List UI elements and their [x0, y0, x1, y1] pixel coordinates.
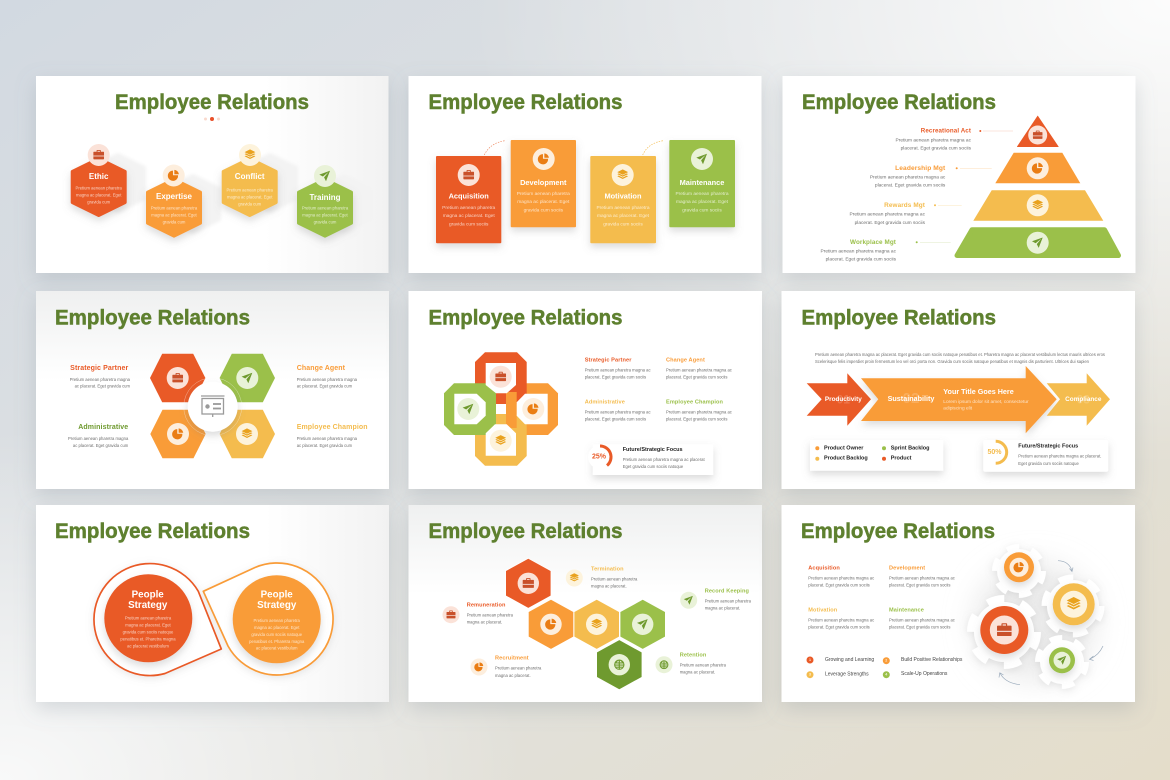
label: recreational act	[896, 128, 1013, 152]
circle: people strategy red: magna ac placerat. Eget	[125, 622, 172, 628]
hexagon: ethic: magna ac placerat. Eget	[76, 192, 122, 198]
arrow: compliance: 03	[1077, 392, 1090, 406]
circle: people strategy orange: penatibus et. Pharetra magna	[249, 639, 305, 644]
label: record keeping: magna ac placerat.	[705, 606, 740, 610]
arrow: sustainability: Lorem ipsum dolor sit amet, consectetur	[943, 399, 1029, 405]
label: remuneration: magna ac placerat.	[467, 620, 502, 624]
label: leadership mgt	[870, 165, 992, 188]
icon: briefcase	[490, 366, 512, 388]
gear: layers	[1053, 583, 1095, 625]
callout: future strategic focus 50%: Future/Strategic Focus	[1018, 443, 1078, 449]
numbered list: 1	[809, 658, 811, 662]
title: Employee Relations	[428, 90, 623, 114]
label: employee champion: Employee Champion	[666, 400, 724, 406]
dashed arrow	[643, 141, 663, 155]
title dots	[204, 117, 220, 121]
arrow: bottom	[999, 673, 1020, 685]
hexagon: administrative	[150, 410, 206, 458]
label: termination: Termination	[591, 567, 624, 573]
label: termination: magna ac placerat.	[591, 584, 627, 588]
hexagon: training: gravida cum	[314, 220, 337, 224]
card: development: gravida cum sociis	[524, 208, 564, 214]
label: change agent: placerat. Eget gravida cum sociis	[666, 374, 727, 380]
label: retention: magna ac placerat.	[680, 670, 715, 674]
label: recruitment: magna ac placerat.	[495, 673, 531, 678]
hexagon: conflict: Conflict	[235, 172, 265, 181]
label: remuneration: Pretium aenean pharetra	[467, 612, 514, 618]
circle: people strategy orange: magna ac placerat. Eget	[254, 625, 300, 630]
label: maintenance: Pretium aenean pharetra magna ac	[889, 618, 955, 622]
label: recreational act: placerat. Eget gravida cum sociis	[901, 146, 972, 152]
callout: future strategic focus 50%	[983, 440, 1108, 472]
arrow: compliance	[1047, 373, 1110, 426]
hexagon: employee champion	[220, 410, 275, 458]
arrow: sustainability: Your Title Goes Here	[943, 387, 1014, 396]
circle: people strategy red: gravida cum sociis natoque	[123, 630, 174, 634]
hexagon: training: magna ac placerat. Eget	[302, 212, 349, 218]
label: motivation: placerat. Eget gravida cum sociis	[808, 624, 870, 630]
pyramid tier: rewards	[973, 190, 1103, 221]
label: recreational act: Pretium aenean pharetra magna ac	[896, 138, 972, 144]
circle: people strategy orange	[233, 575, 321, 663]
arrow: sustainability: Sustainability	[888, 394, 934, 403]
pyramid tier: recreational	[1017, 116, 1058, 147]
numbered list	[806, 656, 963, 678]
card: acquisition: magna ac placerat. Eget	[443, 213, 495, 219]
label: strategic partner: Pretium aenean pharetra magna ac	[585, 368, 651, 372]
hexagon: expertise: Pretium aenean pharetra	[151, 206, 198, 210]
callout: future strategic focus 25%	[588, 444, 713, 475]
callout: future strategic focus 25%: Pretium aenean pharetra magna ac placerat	[623, 457, 705, 462]
circle: people strategy orange: People	[261, 590, 293, 600]
pyramid tier: workplace	[957, 230, 1118, 256]
label: strategic partner: placerat. Eget gravida cum sociis	[585, 374, 646, 380]
label: record keeping: Record Keeping	[705, 589, 749, 595]
hexagon: ethic: Pretium aenean pharetra	[76, 186, 123, 190]
card: acquisition	[436, 156, 501, 243]
label: administrative: Administrative	[585, 400, 625, 406]
numbered list: 4	[885, 673, 887, 677]
label: administrative: Pretium aenean pharetra magna	[68, 436, 129, 441]
arrow: sustainability: adipiscing elit	[943, 406, 973, 412]
hexagon: expertise: Expertise	[156, 192, 193, 201]
label: administrative: placerat. Eget gravida cum sociis	[585, 416, 646, 422]
hexagon: layers	[574, 599, 619, 649]
legend card: Product	[891, 456, 912, 462]
label: change agent	[666, 358, 732, 380]
circle: people strategy orange: Strategy	[257, 600, 297, 611]
circle: people strategy red: ac placerat vestibulum	[127, 644, 169, 648]
hexagon: training: Pretium aenean pharetra	[302, 206, 349, 210]
label: change agent	[297, 365, 358, 388]
gear: plane	[1049, 647, 1075, 673]
intro text: Scelerisque felis imperdiet proin fermentum leo vel orci porta non. Gravida cum sociis natoque penatibus et magnis dis parturient. Ultrices dui sapien	[815, 359, 1090, 364]
numbered list: 2	[885, 659, 887, 663]
label: recruitment: Recruitment	[495, 656, 529, 662]
intro text: Pretium aenean pharetra magna ac placerat. Eget gravida cum sociis natoque penatibus et. Pharetra magna ac placerat vestibulum lectus mauris ultrices eros	[815, 352, 1105, 357]
hexagon: plane	[620, 599, 665, 649]
hexagon: ethic	[72, 144, 144, 216]
panel: honeycomb	[408, 505, 762, 702]
hexagon: conflict: magna ac placerat. Eget	[227, 194, 273, 200]
label: termination: Pretium aenean pharetra	[591, 576, 638, 582]
arrow: top right	[1058, 561, 1073, 572]
label: leadership mgt: Pretium aenean pharetra magna ac	[870, 174, 946, 180]
legend card: Product Backlog	[824, 456, 868, 462]
label: workplace mgt	[821, 239, 951, 262]
callout: future strategic focus 25%: 25%	[592, 454, 607, 460]
label: employee champion: Employee Champion	[297, 424, 368, 431]
hexagon: change agent	[220, 354, 275, 402]
label: change agent: Change Agent	[666, 358, 705, 364]
label: recruitment: Pretium aenean pharetra	[495, 666, 542, 670]
callout: future strategic focus 25%: Future/Strategic Focus	[623, 447, 683, 453]
arrow: right	[1090, 646, 1103, 660]
card: development	[511, 140, 576, 227]
panel: interlocking rings	[408, 291, 762, 489]
legend card: Sprint Backlog	[891, 445, 930, 451]
label: employee champion: ac placerat. Eget gravida cum	[297, 443, 353, 448]
panel: pyramid	[782, 76, 1136, 273]
label: employee champion	[666, 400, 732, 422]
circle: people strategy red: Strategy	[128, 600, 168, 611]
card: development: magna ac placerat. Eget	[517, 199, 570, 205]
callout: future strategic focus 50%: Eget gravida cum sociis natoque	[1018, 461, 1079, 466]
circle: people strategy red: People	[132, 590, 164, 600]
legend card: Product Owner	[824, 445, 864, 451]
label: remuneration: Remuneration	[467, 603, 506, 609]
card: motivation: Pretium aenean pharetra	[596, 205, 650, 211]
label: motivation: Motivation	[808, 607, 838, 613]
label: employee champion: Pretium aenean pharetra magna	[297, 436, 358, 441]
label: workplace mgt: Workplace Mgt	[850, 239, 897, 246]
label: development: Pretium aenean pharetra magna ac	[889, 576, 955, 580]
label: rewards mgt	[850, 202, 962, 226]
hexagon: expertise: gravida cum	[163, 220, 186, 224]
label: acquisition: Acquisition	[808, 565, 840, 571]
teardrop: orange outline	[203, 563, 333, 675]
label: strategic partner: Pretium aenean pharetra magna	[70, 377, 131, 382]
hexagon: training	[298, 165, 370, 236]
numbered list: 3	[809, 673, 811, 677]
label: termination	[566, 567, 638, 588]
circle: people strategy red	[104, 574, 192, 662]
label: employee champion	[297, 424, 368, 448]
gear: briefcase	[980, 606, 1028, 654]
card: motivation	[590, 156, 656, 243]
card: development: Development	[520, 178, 567, 187]
legend card	[810, 440, 943, 471]
origami ring diagram	[444, 352, 558, 466]
card: acquisition: Acquisition	[449, 192, 489, 200]
label: strategic partner	[585, 358, 651, 380]
label: record keeping: Pretium aenean pharetra	[705, 598, 752, 604]
label: rewards mgt: Pretium aenean pharetra magna ac	[850, 212, 926, 218]
label: maintenance	[889, 607, 955, 630]
card: acquisition: Pretium aenean pharetra	[442, 205, 496, 211]
circle: people strategy red: Pretium aenean pharetra	[125, 616, 172, 620]
card: acquisition: gravida cum sociis	[449, 222, 489, 228]
label: retention: Retention	[680, 653, 707, 659]
title: Employee Relations	[428, 519, 623, 543]
label: acquisition: placerat. Eget gravida cum sociis	[808, 582, 870, 588]
circle: people strategy orange: ac placerat vestibulum	[256, 646, 298, 650]
label: change agent: Pretium aenean pharetra magna ac	[666, 368, 732, 372]
numbered list: Leverage Strengths	[825, 672, 869, 678]
label: change agent: ac placerat. Eget gravida cum	[297, 384, 353, 388]
label: strategic partner	[70, 365, 131, 388]
circle: people strategy orange: gravida cum sociis natoque	[251, 632, 303, 637]
card: maintenance: magna ac placerat. Eget	[676, 199, 729, 205]
panel: gears	[782, 505, 1135, 702]
label: record keeping	[680, 589, 752, 610]
label: leadership mgt: placerat. Eget gravida cum sociis	[875, 182, 946, 188]
central hub	[184, 378, 242, 436]
numbered list: Build Positive Relationships	[901, 657, 963, 663]
dashed arrow	[484, 141, 505, 155]
card: development: Pretium aenean pharetra	[517, 191, 570, 197]
teardrop: red outline	[94, 564, 221, 676]
gear: pie	[1004, 552, 1034, 582]
card: maintenance: Pretium aenean pharetra	[675, 191, 729, 197]
label: administrative: Administrative	[78, 424, 128, 431]
label: administrative: Pretium aenean pharetra magna ac	[585, 410, 651, 414]
arrow: compliance: Compliance	[1065, 396, 1102, 403]
label: recreational act: Recreational Act	[921, 128, 971, 134]
label: strategic partner: ac placerat. Eget gravida cum	[75, 384, 131, 388]
label: administrative	[585, 400, 651, 422]
panel: arrows	[782, 291, 1135, 489]
label: workplace mgt: placerat. Eget gravida cum sociis	[826, 256, 897, 262]
title: Employee Relations	[55, 519, 250, 543]
panel: people strategy	[36, 505, 389, 702]
icon: pie chart	[522, 398, 544, 420]
card: motivation: Motivation	[605, 192, 642, 200]
label: leadership mgt: Leadership Mgt	[895, 165, 946, 172]
label: administrative	[68, 424, 129, 448]
label: development	[889, 565, 955, 588]
label: administrative: ac placerat. Eget gravida cum	[73, 443, 129, 448]
icon: presentation board	[201, 396, 224, 417]
hexagon: ethic: gravida cum	[87, 200, 111, 204]
numbered list: Scale-Up Operations	[901, 671, 948, 677]
panel: staggered cards	[408, 76, 762, 273]
label: rewards mgt: placerat. Eget gravida cum sociis	[855, 220, 926, 226]
card: motivation: magna ac placerat. Eget	[597, 213, 650, 219]
hexagon: conflict	[223, 144, 296, 216]
hexagon: conflict: Pretium aenean pharetra	[227, 188, 274, 192]
circle: people strategy orange: Pretium aenean pharetra	[254, 618, 301, 623]
arrow: productivity: 01	[837, 392, 850, 406]
label: workplace mgt: Pretium aenean pharetra magna ac	[821, 248, 897, 254]
callout: future strategic focus 50%: Pretium aenean pharetra magna ac placerat.	[1018, 454, 1101, 458]
arrow: sustainability	[861, 366, 1057, 433]
title: Employee Relations	[801, 519, 995, 543]
pyramid tier: leadership	[995, 153, 1080, 183]
icon: plane	[457, 398, 479, 420]
card: maintenance: Maintenance	[680, 178, 724, 187]
arrow: productivity: Productivity	[825, 396, 862, 403]
label: maintenance: placerat. Eget gravida cum sociis	[889, 624, 950, 630]
background gears	[971, 547, 1101, 686]
label: retention: Pretium aenean pharetra	[680, 662, 727, 668]
circle: people strategy red: penatibus et. Pharetra magna	[120, 636, 176, 642]
title: Employee Relations	[55, 305, 250, 329]
hexagon: training: Training	[309, 193, 341, 202]
card: maintenance	[669, 140, 735, 227]
label: acquisition: Pretium aenean pharetra magna ac	[808, 576, 874, 580]
label: retention	[656, 653, 727, 674]
label: employee champion: placerat. Eget gravida cum sociis	[666, 416, 727, 422]
icon: layers	[490, 430, 512, 452]
card: motivation: gravida cum sociis	[603, 222, 643, 228]
panel: four hexagons around hub	[36, 291, 389, 489]
label: acquisition	[808, 565, 874, 588]
label: remuneration	[442, 603, 514, 624]
hexagon: conflict: gravida cum	[238, 202, 262, 206]
label: motivation: Pretium aenean pharetra magna ac	[808, 618, 874, 622]
title: Employee Relations	[802, 90, 996, 114]
hexagon: expertise: magna ac placerat. Eget	[151, 212, 198, 218]
hexagon: briefcase	[506, 558, 551, 608]
arrow: productivity	[807, 373, 871, 426]
title: Employee Relations	[428, 305, 623, 329]
panel: hexagon steps	[36, 76, 388, 273]
title: Employee Relations	[802, 305, 996, 329]
hexagon: expertise	[148, 164, 220, 236]
arrow: sustainability: 02	[903, 390, 919, 407]
label: recruitment	[470, 656, 542, 678]
label: development: placerat. Eget gravida cum sociis	[889, 582, 950, 588]
label: change agent: Change Agent	[297, 365, 346, 372]
label: rewards mgt: Rewards Mgt	[884, 202, 926, 209]
callout: future strategic focus 50%: 50%	[987, 449, 1002, 456]
label: motivation	[808, 607, 874, 630]
card: maintenance: gravida cum sociis	[682, 208, 722, 214]
callout: future strategic focus 25%: Eget gravida cum sociis natoque	[623, 464, 684, 469]
hexagon: globe	[597, 640, 642, 690]
label: strategic partner: Strategic Partner	[70, 365, 128, 372]
hexagon: pie	[528, 599, 574, 649]
label: maintenance: Maintenance	[889, 607, 924, 613]
label: employee champion: Pretium aenean pharetra magna ac	[666, 410, 732, 414]
title: Employee Relations	[115, 90, 309, 114]
label: strategic partner: Strategic Partner	[585, 358, 632, 364]
numbered list: Growing and Learning	[825, 657, 874, 663]
hexagon: strategic partner	[150, 354, 205, 402]
label: change agent: Pretium aenean pharetra magna	[297, 377, 358, 382]
hexagon: ethic: Ethic	[89, 172, 109, 181]
label: development: Development	[889, 565, 925, 571]
intro text	[815, 352, 1105, 364]
